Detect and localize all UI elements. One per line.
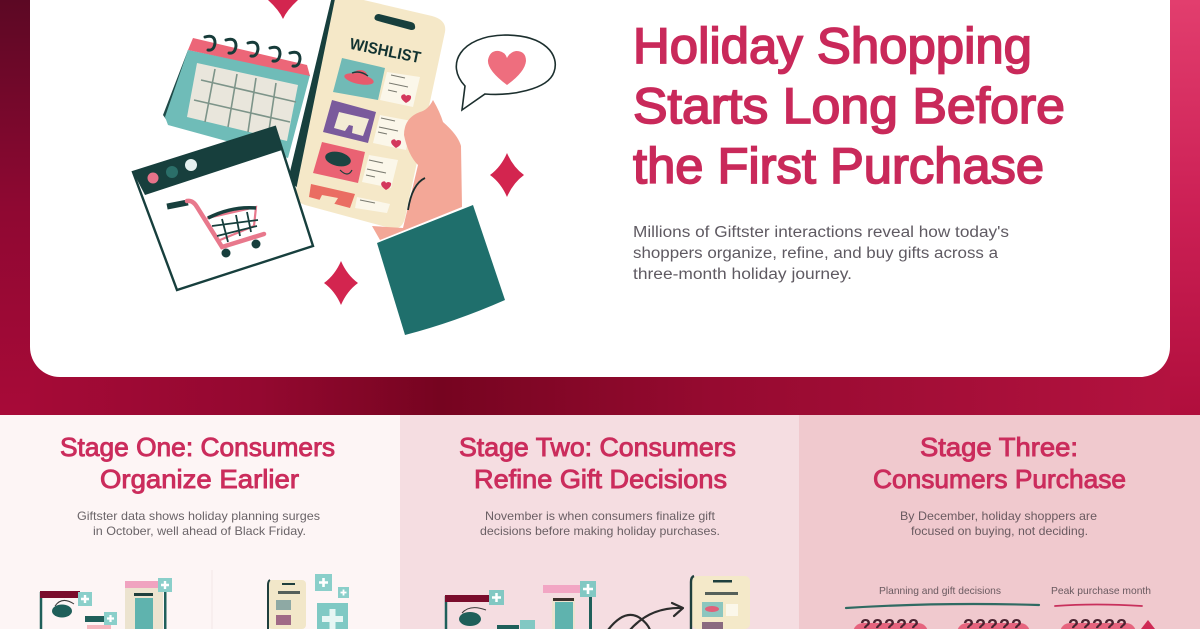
icon: bottom sparkle (324, 261, 358, 305)
stage one heading: Organize Earlier (100, 464, 299, 494)
stage one description (77, 509, 320, 538)
icon: hand (372, 100, 462, 240)
icon: speech bubble with heart (456, 35, 555, 110)
panel: stage three (799, 415, 1200, 629)
intro text: Millions of Giftster interactions reveal how today's (633, 224, 1009, 241)
wishlist label: WISHLIST (348, 36, 422, 67)
stage three heading: Consumers Purchase (873, 464, 1126, 494)
icon: phone wishlist (288, 0, 445, 229)
stage two description: decisions before making holiday purchases. (480, 524, 720, 538)
intro text (633, 224, 1009, 283)
stage two description (480, 509, 720, 538)
label: planning and gift decisions: Planning and gift decisions (879, 585, 1001, 597)
bracket line: peak (1055, 604, 1142, 606)
divider (211, 570, 213, 629)
item 4 (309, 184, 390, 213)
icon: top sparkle (268, 0, 298, 19)
stage three heading (873, 432, 1126, 494)
stage two description: November is when consumers finalize gift (485, 509, 716, 523)
stage three description (900, 509, 1097, 538)
icon: saved items (445, 581, 596, 629)
arrow: looping arrow to phone (608, 603, 683, 629)
title: the First Purchase (633, 138, 1044, 194)
icon: browser window with cart (133, 127, 313, 290)
icon: saved items (40, 578, 172, 629)
title: Holiday Shopping (633, 18, 1032, 74)
stage one heading: Stage One: Consumers (60, 432, 335, 462)
item 3 (313, 142, 398, 190)
icon: sleeve (377, 205, 505, 335)
icon: wishlist phone (691, 576, 750, 629)
stage three description: By December, holiday shoppers are (900, 509, 1097, 523)
label: peak purchase month: Peak purchase month (1051, 585, 1151, 597)
stage one description: in October, well ahead of Black Friday. (93, 524, 306, 538)
icon: right sparkle (490, 153, 524, 197)
panel: hero card (30, 0, 1170, 377)
stage one description: Giftster data shows holiday planning surges (77, 509, 320, 523)
panel: stage two (400, 415, 799, 629)
icon: wishlist phone (268, 574, 349, 629)
bracket line: planning (846, 604, 1039, 608)
title: Starts Long Before (633, 78, 1065, 134)
stage two heading: Refine Gift Decisions (474, 464, 727, 494)
title (633, 18, 1065, 194)
item 1 (333, 58, 420, 107)
stage two heading (459, 432, 736, 494)
cart (170, 201, 264, 258)
icon: peak marker (1141, 620, 1155, 629)
icon: calendar (163, 36, 310, 158)
stage two heading: Stage Two: Consumers (459, 432, 736, 462)
stage three heading: Stage Three: (920, 432, 1078, 462)
stage one heading (60, 432, 335, 494)
intro text: shoppers organize, refine, and buy gifts across a (633, 245, 998, 262)
item 2 (323, 100, 412, 150)
background: crimson gradient (0, 0, 1200, 416)
illustration: holiday shopping (133, 0, 555, 335)
intro text: three-month holiday journey. (633, 266, 852, 283)
stage three description: focused on buying, not deciding. (911, 524, 1088, 538)
panel: stage one (0, 415, 400, 629)
